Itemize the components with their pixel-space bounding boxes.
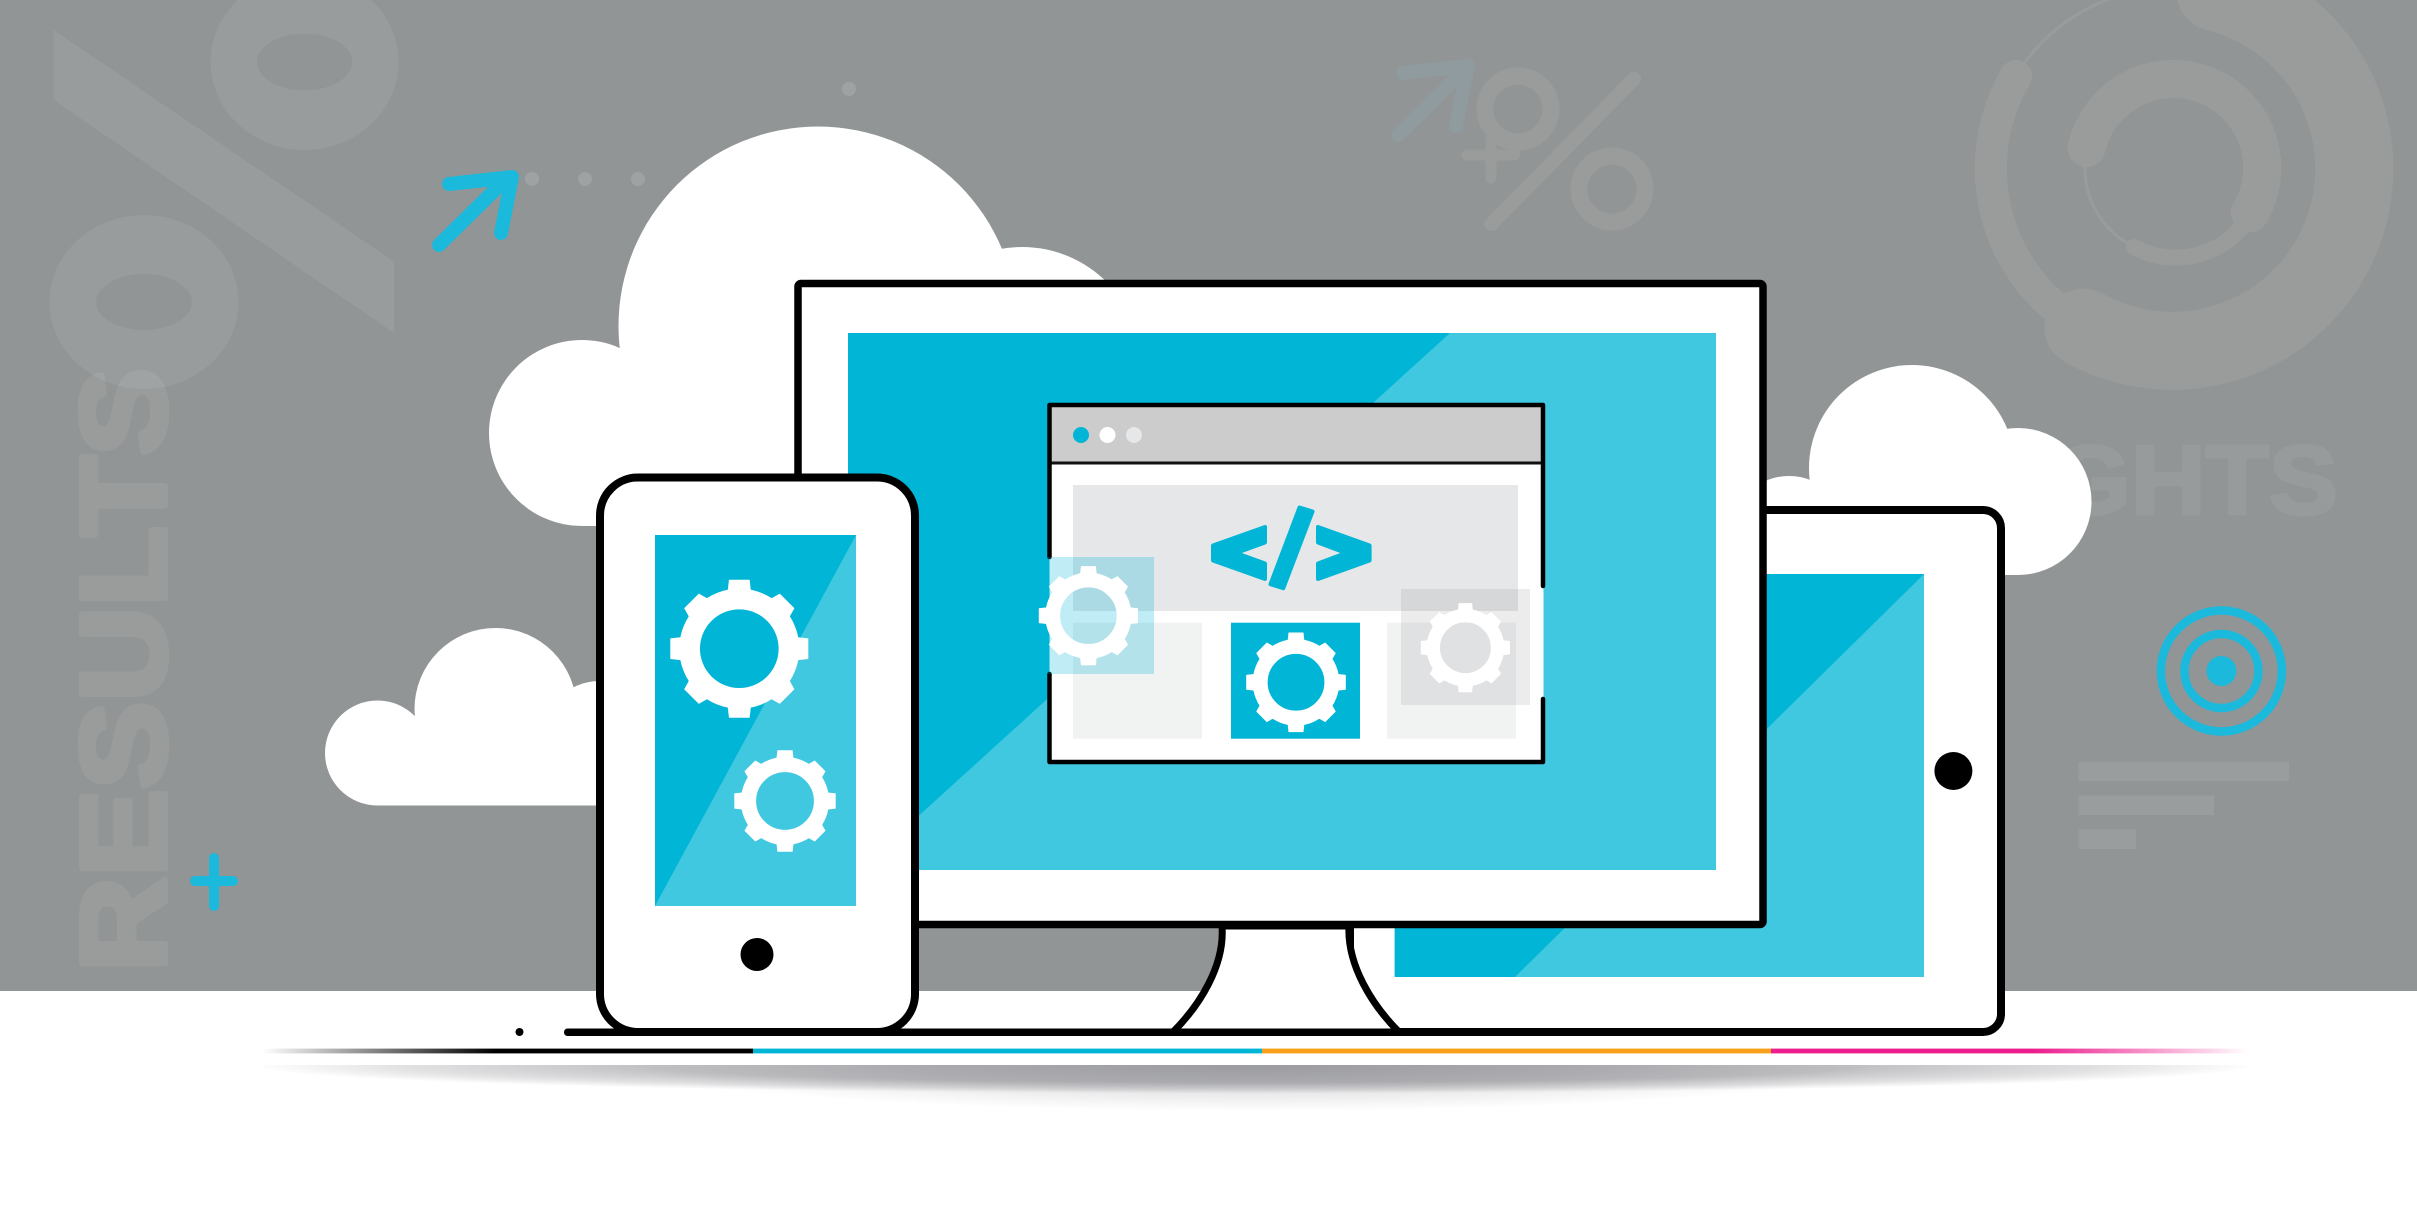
cloud: right <box>1729 365 2092 596</box>
watermark: giant rotated percent sign <box>50 0 399 389</box>
window border <box>1050 405 1543 762</box>
watermark: faint teal arrow <box>1398 66 1468 135</box>
window title bar <box>1050 405 1543 464</box>
base line of devices <box>516 1028 1984 1036</box>
browser window <box>1039 405 1544 762</box>
tablet device <box>1350 510 2001 1032</box>
icon: target <box>2161 610 2282 732</box>
floating gray square with gear <box>1401 589 1530 705</box>
tablet screen <box>1395 574 1924 977</box>
small gear <box>734 750 836 852</box>
phone home button <box>740 938 774 971</box>
desktop monitor <box>798 284 1763 924</box>
watermark: circular ring diagram <box>1991 0 2354 351</box>
lower left panel <box>1073 623 1202 739</box>
cloud: large left <box>489 126 1142 526</box>
smartphone <box>600 478 915 1032</box>
monitor screen <box>848 333 1716 870</box>
watermark: small percent sign <box>1467 76 1645 224</box>
cloud: lower left <box>325 628 660 806</box>
hero panel <box>1073 485 1518 611</box>
icon: blue growth arrow <box>439 177 512 245</box>
watermark: RESULTS vertical text: RESULTS <box>56 368 191 972</box>
text placeholder bars <box>2079 762 2289 849</box>
lower center panel with gear <box>1231 623 1360 739</box>
colour stripe <box>262 1049 2249 1053</box>
icon: blue plus sign <box>195 858 233 906</box>
dotted trail beside arrow <box>525 82 856 186</box>
floating blue square with gear <box>1039 557 1154 674</box>
lower right panel <box>1387 623 1516 739</box>
code icon <box>1213 508 1370 588</box>
large gear <box>670 580 808 718</box>
ground shadow <box>294 1065 2214 1104</box>
tablet home button <box>1934 752 1972 790</box>
phone screen <box>655 535 856 906</box>
monitor stand <box>1173 926 1399 1032</box>
watermark: INSIGHTS text: INSIGHTS <box>1849 425 2338 535</box>
